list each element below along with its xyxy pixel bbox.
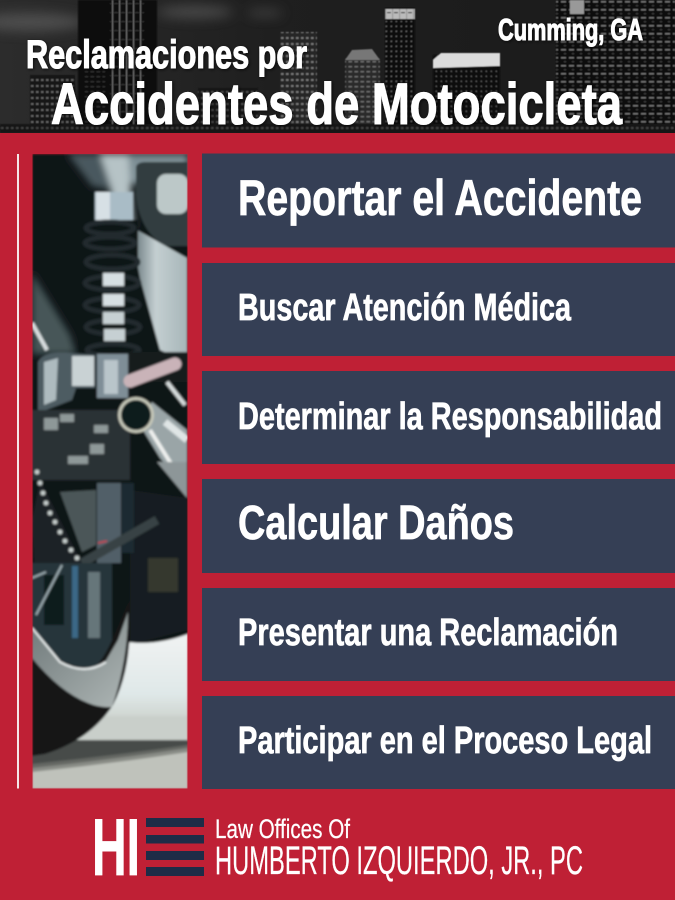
decorative white line bbox=[17, 154, 19, 788]
step text: Buscar Atención Médica bbox=[238, 287, 572, 329]
header: city skyline bbox=[0, 0, 675, 133]
title line 1: Reclamaciones por bbox=[26, 33, 307, 77]
footer logo bbox=[92, 803, 583, 893]
panel background bbox=[202, 588, 675, 681]
step panel 1 bbox=[202, 154, 675, 248]
panel background bbox=[202, 479, 675, 573]
step panel 5 bbox=[202, 588, 675, 681]
panel background bbox=[202, 154, 675, 248]
step panel 3 bbox=[202, 371, 675, 464]
step panel 4 bbox=[202, 479, 675, 573]
step text: Calcular Daños bbox=[238, 497, 514, 550]
firm name small: Law Offices Of bbox=[215, 814, 350, 844]
panel background bbox=[202, 696, 675, 789]
panel background bbox=[202, 371, 675, 464]
photo: motorcycle rear wheel bbox=[32, 154, 188, 789]
panel background bbox=[202, 263, 675, 356]
step panel 2 bbox=[202, 263, 675, 356]
logo bars bbox=[146, 818, 204, 876]
step panel 6 bbox=[202, 696, 675, 789]
logo monogram: HI bbox=[92, 803, 140, 893]
